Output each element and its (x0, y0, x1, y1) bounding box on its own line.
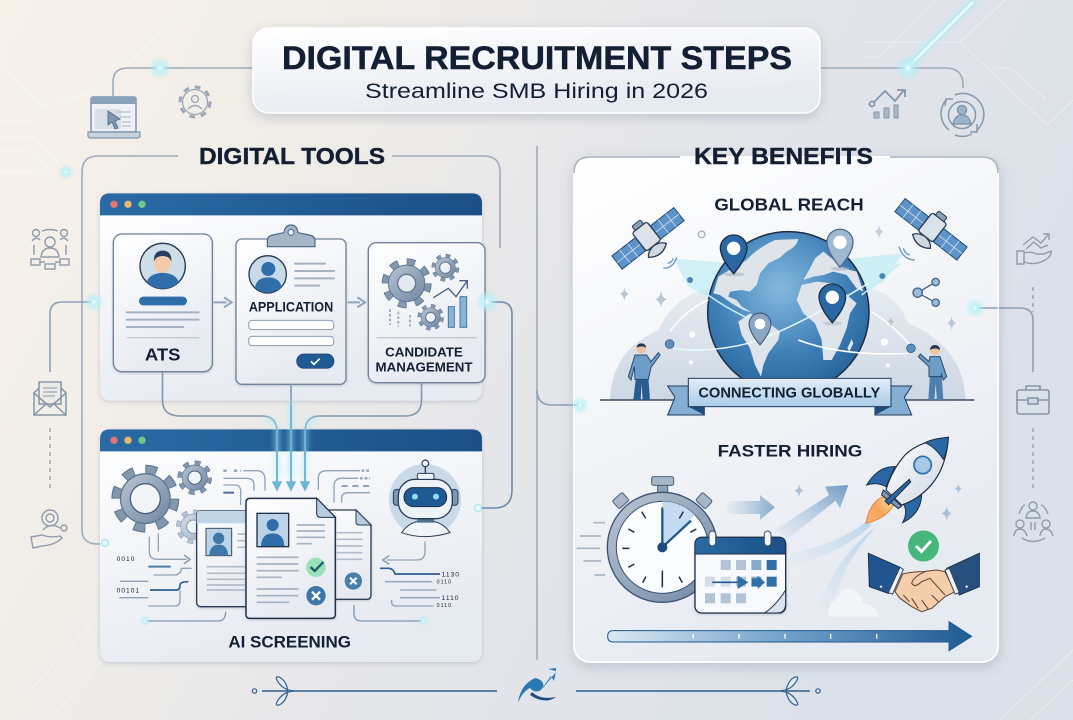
person: left (628, 343, 660, 400)
heading: FASTER HIRING (718, 442, 862, 461)
document: right (313, 510, 371, 599)
timeline arrow (608, 622, 972, 651)
icon: team exchange (1014, 502, 1053, 542)
icon: hand with person (31, 510, 67, 548)
arrow: horizontal speed (727, 495, 775, 520)
gears (116, 463, 209, 541)
window: tools flow (100, 193, 485, 401)
ground line (600, 398, 974, 402)
icon: hand with rising chart (1017, 234, 1051, 264)
hills (610, 287, 966, 400)
icon: check badge (908, 530, 939, 562)
card: ATS (113, 234, 212, 372)
window: AI screening (100, 429, 482, 662)
icon: robot (389, 460, 461, 537)
subtitle: Streamline SMB Hiring in 2026 (365, 80, 708, 103)
bottom ornament (252, 668, 820, 705)
card: application (236, 225, 346, 384)
arrow: rising (775, 485, 848, 538)
connector and glow nodes over panels (58, 55, 998, 414)
data digits: 0110 (437, 603, 452, 609)
satellite: left (605, 199, 691, 278)
data digits: 00101 (117, 587, 140, 594)
data digits: 1130 (442, 572, 460, 579)
circuit lines (119, 471, 440, 621)
icon: gear with person (180, 87, 210, 117)
signal arcs (663, 247, 915, 268)
icon: laptop with cursor (88, 97, 140, 138)
data digits: 1110 (442, 595, 459, 602)
data digits: 0010 (117, 556, 135, 563)
card: application: APPLICATION (249, 298, 333, 314)
card: candidate management: MANAGEMENT (375, 360, 473, 375)
connection arcs (670, 263, 912, 354)
glow nodes inside window (140, 616, 429, 626)
ribbon banner (668, 378, 912, 415)
icon: calendar (695, 531, 786, 613)
card: candidate management: CANDIDATE (385, 344, 463, 359)
arrow: application to candidate management (348, 297, 365, 307)
globe (708, 232, 869, 393)
panel: key benefits (574, 143, 998, 662)
person: right (918, 345, 947, 400)
icon: briefcase (1017, 386, 1049, 414)
ribbon banner: CONNECTING GLOBALLY (698, 385, 881, 401)
document: left (197, 511, 260, 607)
speed lines (577, 523, 605, 575)
card: ATS: ATS (145, 344, 180, 364)
sparkles (794, 483, 962, 521)
heading: GLOBAL REACH (714, 195, 864, 215)
heading: key benefits: KEY BENEFITS (694, 143, 873, 169)
icon: arrow logo (518, 668, 556, 703)
icon: person in refresh circle (941, 93, 984, 136)
document: centre (246, 498, 335, 618)
data digits (117, 556, 460, 609)
icon: growth chart (870, 90, 905, 118)
title: DIGITAL RECRUITMENT STEPS (282, 40, 792, 76)
icon: people network (31, 230, 69, 269)
label: AI screening: AI SCREENING (228, 632, 351, 651)
streak of light top right (906, 0, 975, 68)
data digits: 0110 (437, 580, 452, 586)
section: faster hiring (577, 442, 972, 651)
satellite: right (888, 190, 974, 269)
icon: share nodes (913, 278, 939, 306)
icon: rocket (866, 437, 948, 523)
plume and swooshes (788, 520, 879, 617)
connectors into AI screening (102, 372, 482, 546)
section: global reach (600, 190, 974, 415)
icon: envelope (34, 382, 66, 415)
beams (673, 253, 903, 297)
heading: digital tools: DIGITAL TOOLS (199, 143, 385, 169)
icon: handshake (868, 553, 979, 612)
title card (253, 28, 820, 113)
connector lines around header and panels (50, 68, 1033, 660)
card: candidate management (368, 243, 485, 383)
small dots and sparkles (620, 225, 956, 367)
arrow: ATS to application (213, 297, 232, 307)
icon: stopwatch (607, 477, 717, 602)
location pins (720, 229, 853, 345)
